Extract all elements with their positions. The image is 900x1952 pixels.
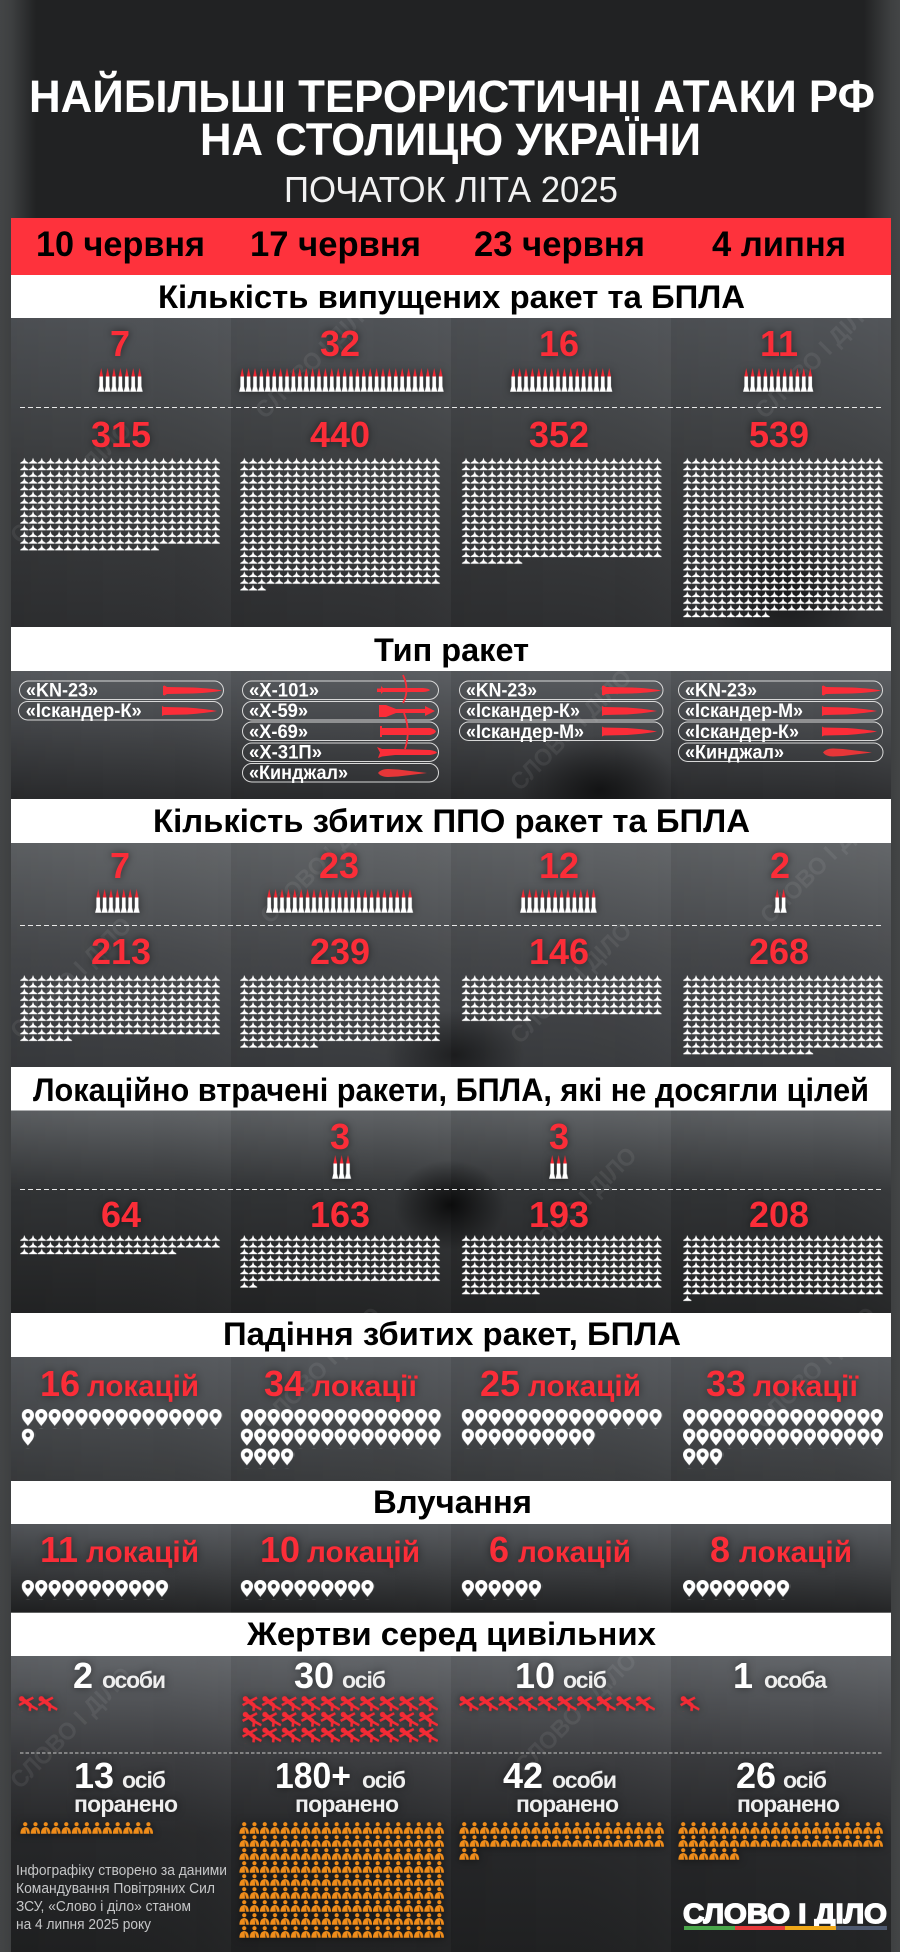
watermarks — [5, 292, 887, 1794]
hit location labels: 10 — [260, 1529, 300, 1570]
launched missile counts: 32 — [320, 323, 360, 364]
killed labels: осіб — [342, 1667, 386, 1693]
killed labels: осіб — [563, 1667, 607, 1693]
column 2 missile types: «Х-101» — [249, 681, 319, 702]
shot down missile counts: 7 — [110, 845, 130, 886]
injured labels: осіб — [122, 1767, 166, 1793]
injured labels: поранено — [737, 1791, 840, 1817]
injured labels: 42 — [503, 1755, 543, 1796]
killed labels: 2 — [73, 1655, 93, 1696]
date header bar: 4 липня — [712, 225, 846, 264]
lost missile counts: 3 — [330, 1116, 350, 1157]
column 3 missile types — [460, 681, 663, 743]
shot down missile icons — [95, 889, 787, 913]
watermarks: СЛОВО І ДІЛО — [255, 1302, 387, 1434]
debris location labels: локацій — [528, 1370, 641, 1403]
hit location labels: локацій — [307, 1536, 420, 1569]
debris location labels: локації — [753, 1370, 859, 1403]
date header bar: 10 червня — [36, 225, 205, 264]
shot down drone counts: 213 — [91, 931, 151, 972]
lost drone counts: 163 — [310, 1194, 370, 1235]
launched drone icons — [20, 458, 883, 618]
injured labels: 180+ — [275, 1755, 351, 1796]
debris location labels: 16 — [40, 1363, 80, 1404]
launched missile counts — [110, 323, 798, 364]
section heading: hits — [11, 1481, 891, 1524]
hit location labels: 6 — [489, 1529, 509, 1570]
title: НА СТОЛИЦЮ УКРАЇНИ — [200, 114, 701, 165]
hit location labels: 11 — [40, 1529, 78, 1570]
shot down missile counts — [110, 845, 790, 886]
lost drone icons — [20, 1235, 883, 1302]
watermarks: СЛОВО І ДІЛО — [510, 1647, 642, 1779]
injured labels: осіб — [783, 1767, 827, 1793]
injured labels: осіб — [362, 1767, 406, 1793]
debris location pins — [22, 1409, 884, 1468]
watermarks: СЛОВО І ДІЛО — [505, 664, 637, 796]
section heading: missile types — [11, 627, 891, 671]
column 4 missile types: «Кинджал» — [685, 742, 784, 764]
lost missile counts: 3 — [549, 1116, 569, 1157]
section heading: civilian casualties: Жертви серед цивільних — [246, 1616, 656, 1652]
launched missile counts: 11 — [760, 323, 798, 364]
shot down missile counts: 12 — [539, 845, 579, 886]
injured labels: поранено — [295, 1791, 399, 1817]
injured labels: 26 — [736, 1755, 776, 1796]
section heading: hits: Влучання — [373, 1484, 532, 1520]
lost drone counts: 208 — [749, 1194, 809, 1235]
section heading: launched: Кількість випущених ракет та БПЛА — [158, 279, 745, 315]
injured labels — [74, 1755, 840, 1817]
watermarks: СЛОВО І ДІЛО — [250, 292, 382, 424]
column 3 missile types: «Іскандер-К» — [466, 701, 580, 722]
hit location pins — [22, 1580, 790, 1600]
column 2 missile types — [242, 675, 438, 784]
section heading: debris falls — [11, 1313, 891, 1357]
shot down drone counts: 146 — [529, 931, 589, 972]
debris location labels: локацій — [87, 1370, 199, 1403]
injured labels: 13 — [74, 1755, 114, 1796]
section heading: missile types: Тип ракет — [374, 632, 529, 668]
column 1 missile types: «Іскандер-К» — [26, 701, 142, 722]
column 1 missile types: «KN-23» — [26, 681, 98, 702]
hit location labels: 8 — [710, 1529, 730, 1570]
injured labels: поранено — [516, 1791, 619, 1817]
section heading: debris falls: Падіння збитих ракет, БПЛА — [223, 1316, 681, 1352]
launched missile counts: 16 — [539, 323, 579, 364]
killed labels: 10 — [515, 1655, 555, 1696]
watermarks: СЛОВО І ДІЛО — [510, 1142, 642, 1274]
section heading: shot down — [11, 799, 891, 843]
watermarks: СЛОВО І ДІЛО — [755, 797, 887, 929]
title: НАЙБІЛЬШІ ТЕРОРИСТИЧНІ АТАКИ РФ — [29, 71, 875, 122]
date header bar — [11, 218, 891, 275]
title — [29, 71, 875, 165]
date header bar: 17 червня — [250, 225, 421, 264]
shot down missile counts: 2 — [770, 845, 790, 886]
column 1 missile types — [18, 681, 224, 722]
watermarks: СЛОВО І ДІЛО — [750, 1302, 882, 1434]
section heading: launched — [11, 275, 891, 318]
killed labels — [73, 1655, 827, 1696]
lost drone counts: 193 — [529, 1194, 589, 1235]
shot down drone counts: 268 — [749, 931, 809, 972]
column 2 missile types: «Кинджал» — [249, 763, 348, 784]
shot down drone icons — [20, 975, 883, 1055]
column 4 missile types: «Іскандер-К» — [685, 722, 799, 743]
panel: civilian casualties — [18, 1655, 883, 1939]
killed icons — [18, 1696, 700, 1743]
lost missile icons — [332, 1155, 568, 1179]
launched missile icons — [98, 368, 813, 392]
watermarks: СЛОВО І ДІЛО — [750, 292, 882, 424]
killed labels: 1 — [733, 1655, 753, 1696]
watermarks: СЛОВО І ДІЛО — [5, 1662, 137, 1794]
section heading: lost: Локаційно втрачені ракети, БПЛА, які не досягли цілей — [33, 1072, 869, 1108]
date header bar: 23 червня — [474, 225, 645, 264]
section heading: civilian casualties — [11, 1613, 891, 1656]
shot down drone counts — [91, 931, 809, 972]
panel: lost — [20, 1116, 883, 1302]
source note: на 4 липня 2025 року — [16, 1916, 151, 1933]
watermarks: СЛОВО І ДІЛО — [5, 417, 137, 549]
watermarks: СЛОВО І ДІЛО — [5, 912, 137, 1044]
panel: launched missiles and drones — [20, 323, 883, 618]
hit location labels: локацій — [86, 1536, 199, 1569]
subtitle: ПОЧАТОК ЛІТА 2025 — [284, 169, 618, 210]
column 4 missile types: «Іскандер-М» — [685, 701, 803, 722]
section heading: shot down: Кількість збитих ППО ракет та БПЛА — [153, 803, 750, 839]
source note: Командування Повітряних Сил — [16, 1880, 215, 1897]
injured icons — [20, 1822, 883, 1939]
source note — [16, 1862, 227, 1933]
injured labels: поранено — [74, 1791, 178, 1817]
panel: missile types — [18, 675, 883, 784]
debris location labels: 25 — [480, 1363, 520, 1404]
column 3 missile types: «Іскандер-М» — [466, 722, 584, 743]
lost missile counts — [330, 1116, 569, 1157]
launched drone counts: 539 — [749, 414, 809, 455]
shot down drone counts: 239 — [310, 931, 370, 972]
debris location labels: 33 — [706, 1363, 746, 1404]
launched drone counts: 440 — [310, 414, 370, 455]
column 3 missile types: «KN-23» — [466, 681, 537, 702]
killed labels: 30 — [294, 1655, 334, 1696]
launched drone counts: 352 — [529, 414, 589, 455]
killed labels: особи — [102, 1667, 166, 1693]
source note: ЗСУ, «Слово і діло» станом — [16, 1898, 191, 1915]
hit location labels: локацій — [518, 1536, 631, 1569]
debris location labels — [40, 1363, 859, 1404]
killed labels: особа — [764, 1667, 827, 1693]
injured labels: особи — [552, 1767, 617, 1793]
panel: hit locations — [22, 1529, 852, 1600]
hit location labels — [40, 1529, 852, 1570]
launched drone counts: 315 — [91, 414, 151, 455]
launched missile counts: 7 — [110, 323, 130, 364]
column 2 missile types: «Х-59» — [249, 701, 308, 722]
debris location labels: локації — [312, 1370, 418, 1403]
shot down missile counts: 23 — [319, 845, 359, 886]
debris location labels: 34 — [264, 1363, 304, 1404]
lost drone counts — [101, 1194, 809, 1235]
column 2 missile types: «Х-69» — [249, 722, 308, 743]
panel: debris locations — [22, 1363, 884, 1468]
column 2 missile types: «Х-31П» — [249, 742, 322, 764]
column 4 missile types: «KN-23» — [685, 681, 757, 702]
hit location labels: локацій — [739, 1536, 852, 1569]
watermarks: СЛОВО І ДІЛО — [505, 917, 637, 1049]
logo: СЛОВО І ДІЛО — [683, 1898, 887, 1929]
launched drone counts — [91, 414, 809, 455]
column 4 missile types — [678, 681, 883, 764]
watermarks: СЛОВО І ДІЛО — [255, 797, 387, 929]
panel: shot down — [20, 845, 883, 1055]
source note: Інфографіку створено за даними — [16, 1862, 227, 1879]
lost drone counts: 64 — [101, 1194, 141, 1235]
